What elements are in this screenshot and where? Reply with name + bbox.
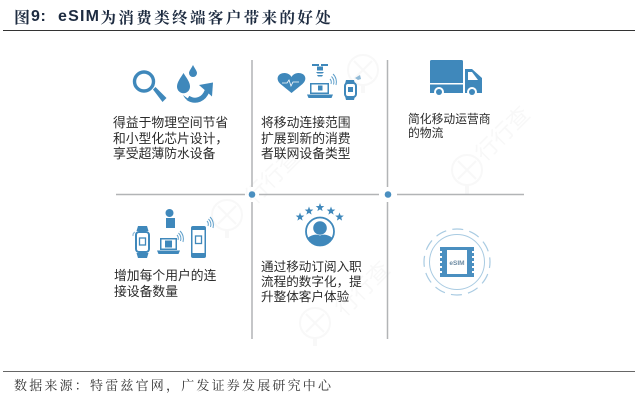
text: onboarding digitalization: 流程的数字化，提: [261, 275, 362, 289]
text: onboarding digitalization: [261, 260, 362, 304]
text: ultra-thin waterproof: 得益于物理空间节省: [113, 115, 228, 130]
text: extended range: 扩展到新的消费: [261, 130, 351, 146]
title: 为消费类终端客户带来的好处: [100, 6, 333, 28]
text: more connected devices: 增加每个用户的连: [114, 268, 216, 283]
text: extended range: 将移动连接范围: [261, 115, 351, 130]
footer rule: [3, 370, 635, 372]
title: 图: [14, 5, 30, 28]
title: [14, 5, 333, 28]
watermark text: 行行查: [330, 256, 395, 321]
text: ultra-thin waterproof: 享受超薄防水设备: [113, 146, 215, 161]
title: eSIM: [58, 8, 100, 25]
icon: eSIM chip: eSIM: [449, 260, 465, 267]
title: 9:: [31, 8, 46, 25]
text: extended range: 者联网设备类型: [261, 146, 351, 161]
text: simplified logistics: [408, 112, 491, 140]
text: simplified logistics: 的物流: [408, 126, 443, 140]
text: ultra-thin waterproof: [113, 115, 228, 161]
source note: 数据来源：特雷兹官网，广发证券发展研究中心: [14, 375, 333, 394]
text: simplified logistics: 简化移动运营商: [408, 112, 491, 126]
text: onboarding digitalization: 通过移动订阅入职: [261, 260, 362, 274]
text: more connected devices: 接设备数量: [114, 284, 178, 299]
watermark text: 行行查: [240, 144, 305, 209]
text: extended range: [261, 115, 351, 161]
text: ultra-thin waterproof: 和小型化芯片设计，: [113, 130, 228, 146]
text: more connected devices: [114, 268, 216, 299]
watermark text: 行行查: [470, 101, 535, 166]
title rule: [3, 30, 635, 31]
text: onboarding digitalization: 升整体客户体验: [261, 290, 349, 304]
